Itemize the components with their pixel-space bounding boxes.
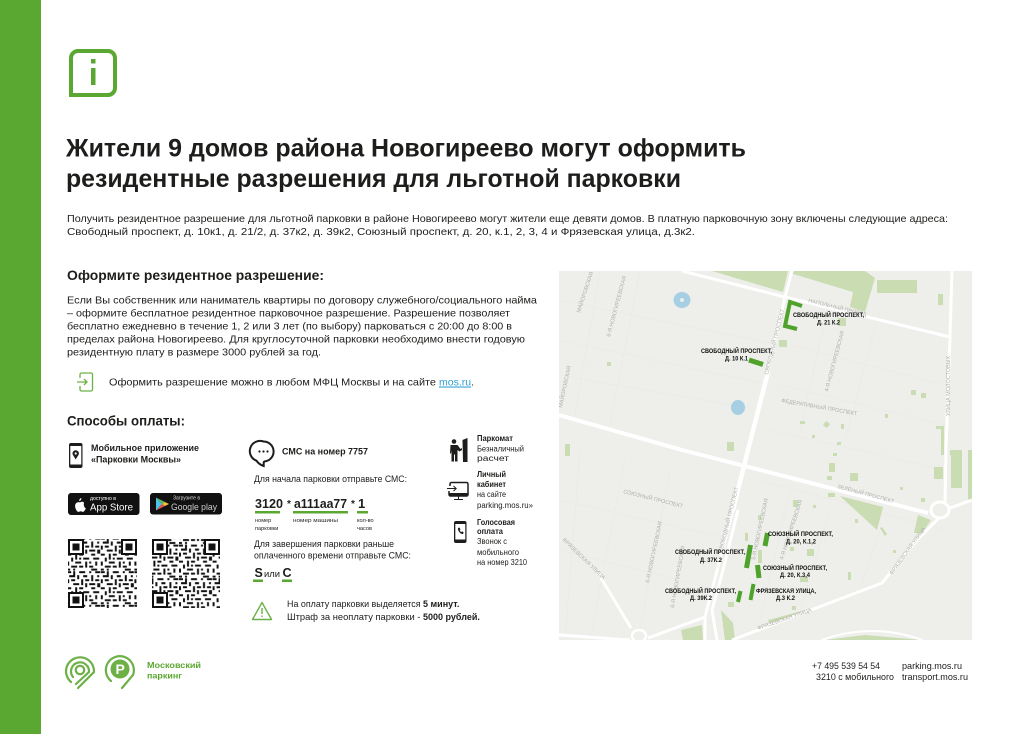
brand name: паркинг	[147, 670, 182, 680]
personal account text: Личный	[477, 470, 506, 479]
voice payment text	[477, 518, 528, 567]
contacts: 3210 с мобильного	[816, 672, 894, 683]
SMS instructions: Для начала парковки отправьте СМС:	[254, 474, 407, 484]
SMS instructions: *	[351, 499, 355, 510]
personal account text	[477, 470, 534, 510]
contacts: transport.mos.ru	[902, 672, 968, 683]
brand name	[147, 660, 201, 680]
SMS instructions: СМС на номер 7757	[282, 446, 368, 456]
warning text	[287, 599, 480, 622]
SMS instructions: парковки	[255, 526, 278, 532]
icon: mobile app	[69, 443, 82, 468]
road labels: СОЮЗНЫЙ ПРОСПЕКТ	[623, 487, 685, 510]
heading: permit: Оформите резидентное разрешение:	[67, 267, 324, 283]
permit description	[67, 294, 537, 358]
map labels: СВОБОДНЫЙ ПРОСПЕКТ,	[701, 347, 772, 355]
map labels: ФРЯЗЕВСКАЯ УЛИЦА,	[756, 589, 816, 595]
title: резидентные разрешения для льготной парковки	[66, 165, 681, 193]
road labels: МАЙОРОВСКАЯ УЛ	[574, 262, 598, 314]
road labels: ФРЯЗЕВСКАЯ УЛИЦА	[561, 537, 606, 581]
badge: App Store	[68, 493, 140, 515]
road labels: НАПОЛЬНЫЙ ПРОЕЗД	[808, 296, 868, 318]
permit description: – оформите бесплатное резидентное парковочное разрешение. Разрешение позволяет	[67, 308, 510, 320]
building markers	[738, 302, 802, 602]
road labels: ФРЯЗЕВСКАЯ УЛИЦА	[757, 608, 813, 632]
SMS instructions: кол-во	[357, 518, 374, 524]
personal account text: parking.mos.ru»	[477, 501, 534, 510]
map labels: СВОБОДНЫЙ ПРОСПЕКТ,	[665, 587, 736, 595]
permit description: резидентную плату в размере 3000 рублей за год.	[67, 346, 321, 358]
parking meter text	[477, 434, 524, 463]
intro text: Свободный проспект, д. 10к1, д. 21/2, д. 37к2, д. 39к2, Союзный проспект, д. 20, к.1, 2, 3, 4 и Фрязевская улица, д.3к2.	[67, 226, 695, 238]
SMS instructions: часов	[357, 526, 372, 532]
SMS instructions: а111аа77	[294, 496, 347, 511]
SMS instructions: 3120	[255, 496, 283, 511]
QR code: App Store	[68, 539, 137, 608]
road labels: УЛИЦА МОЛОСТОВЫХ	[946, 355, 952, 416]
icon: parking meter	[450, 438, 468, 462]
icon: phone	[454, 521, 466, 543]
icon: info	[69, 51, 115, 97]
icon: monitor	[447, 482, 468, 500]
SMS instructions: оплаченного времени отправьте СМС:	[254, 550, 411, 560]
map labels: Д. 21 К.2	[817, 320, 841, 326]
SMS instructions: номер	[255, 518, 271, 524]
SMS instructions: Для завершения парковки раньше	[254, 539, 394, 549]
road labels: СВОБОДНЫЙ ПРОСПЕКТ	[762, 308, 786, 375]
badge: App Store: App Store	[90, 502, 133, 514]
permit description: пределах района Новогиреево. Для круглосуточной парковки необходимо внести годовую	[67, 334, 525, 346]
QR code: Google Play	[152, 539, 220, 608]
mobile app label: Мобильное приложение	[91, 443, 199, 453]
icon: warning	[252, 602, 272, 620]
SMS instructions: C	[282, 566, 292, 580]
parking meter text: Паркомат	[477, 434, 513, 443]
map labels: Д. 20, К.3,4	[780, 573, 811, 579]
voice payment text: Звонок с	[477, 537, 507, 546]
road labels: 4-Я НОВОГИРЕЕВСКАЯ	[824, 330, 846, 393]
heading: payment: Способы оплаты:	[67, 414, 185, 428]
voice payment text: мобильного	[477, 548, 520, 557]
badge: Google Play	[150, 493, 222, 514]
logo: parking	[106, 656, 134, 688]
SMS instructions: *	[287, 499, 291, 510]
map labels: СВОБОДНЫЙ ПРОСПЕКТ,	[675, 548, 745, 556]
road labels: 6-Я НОВОГИРЕЕВСКАЯ	[606, 275, 628, 338]
personal account text: кабинет	[477, 480, 506, 489]
SMS instructions: 1	[358, 496, 365, 511]
callout: where to apply: Оформить разрешение можно в любом МФЦ Москвы и на сайте mos.ru.	[109, 376, 474, 388]
contacts: +7 495 539 54 54	[812, 661, 880, 672]
voice payment text: Голосовая	[477, 518, 515, 527]
badge: App Store: доступно в	[90, 496, 116, 502]
SMS instructions	[253, 446, 411, 582]
map labels: СОЮЗНЫЙ ПРОСПЕКТ,	[768, 530, 833, 538]
logo: Moscow transport	[66, 657, 94, 688]
road labels: 4-Я НОВОГИРЕЕВСКАЯ	[779, 499, 804, 561]
warning text: Штраф за неоплату парковки - 5000 рублей.	[287, 612, 480, 622]
warning text: На оплату парковки выделяется 5 минут.	[287, 599, 459, 609]
logo: parking: P	[116, 661, 125, 677]
parking meter text: расчет	[477, 454, 509, 463]
map labels: СОЮЗНЫЙ ПРОСПЕКТ,	[763, 564, 827, 572]
mobile app label	[91, 443, 199, 464]
map labels: Д. 20, К.1,2	[786, 540, 817, 546]
SMS instructions: S	[254, 566, 263, 580]
map labels	[665, 311, 864, 602]
road labels	[556, 262, 952, 632]
title	[65, 134, 746, 193]
map labels: Д. 37К.2	[700, 558, 723, 564]
icon: enter	[77, 373, 92, 391]
permit description: бесплатно ежедневно в течение 1, 2 или 3 лет (по выбору) парковаться с 20:00 до 8:00 в	[67, 320, 512, 332]
map labels: Д.3 К.2	[776, 596, 796, 602]
road labels: 6-Я НОВОГИРЕЕВСКАЯ	[645, 521, 664, 583]
intro text	[67, 213, 948, 238]
road labels: 6-Я НОВОГИРЕЕВСКАЯ	[670, 546, 687, 608]
road labels: ФЕДЕРАТИВНЫЙ ПРОСПЕКТ	[781, 396, 859, 417]
permit description: Если Вы собственник или наниматель квартиры по договору служебного/социального найма	[67, 294, 537, 306]
personal account text: на сайте	[477, 490, 506, 499]
icon: SMS bubble	[250, 441, 274, 466]
road labels: 5-Я НОВОГИРЕЕВСКАЯ	[751, 498, 770, 560]
road labels: МАЙОРОВСКАЯ	[556, 365, 573, 408]
road labels: ФРЯЗЕВСКАЯ УЛИЦА	[889, 526, 927, 576]
title: Жители 9 домов района Новогиреево могут оформить	[65, 134, 746, 162]
map labels: Д. 39К.2	[690, 596, 713, 602]
contacts	[812, 661, 968, 683]
badge: Google Play: Google play	[171, 502, 217, 513]
map labels: Д. 10 К.1	[725, 356, 749, 362]
map labels: СВОБОДНЫЙ ПРОСПЕКТ,	[793, 311, 864, 319]
green side bar	[0, 0, 41, 734]
brand name: Московский	[147, 660, 201, 670]
badge: Google Play: Загрузите в	[173, 496, 200, 502]
contacts: parking.mos.ru	[902, 661, 962, 672]
mobile app label: «Парковки Москвы»	[91, 454, 181, 464]
voice payment text: на номер 3210	[477, 558, 528, 567]
SMS instructions: или	[264, 569, 280, 579]
panel: map	[556, 262, 972, 642]
intro text: Получить резидентное разрешение для льготной парковки в районе Новогиреево могут жители еще девяти домов. В платную парковочную зону включены следующие адреса:	[67, 213, 948, 225]
SMS instructions: номер машины	[293, 518, 338, 524]
parking meter text: Безналичный	[477, 444, 524, 454]
voice payment text: оплата	[477, 527, 504, 536]
road labels: ЗЕЛЁНЫЙ ПРОСПЕКТ	[836, 482, 896, 505]
road labels: СВОБОДНЫЙ ПРОСПЕКТ	[716, 486, 740, 553]
